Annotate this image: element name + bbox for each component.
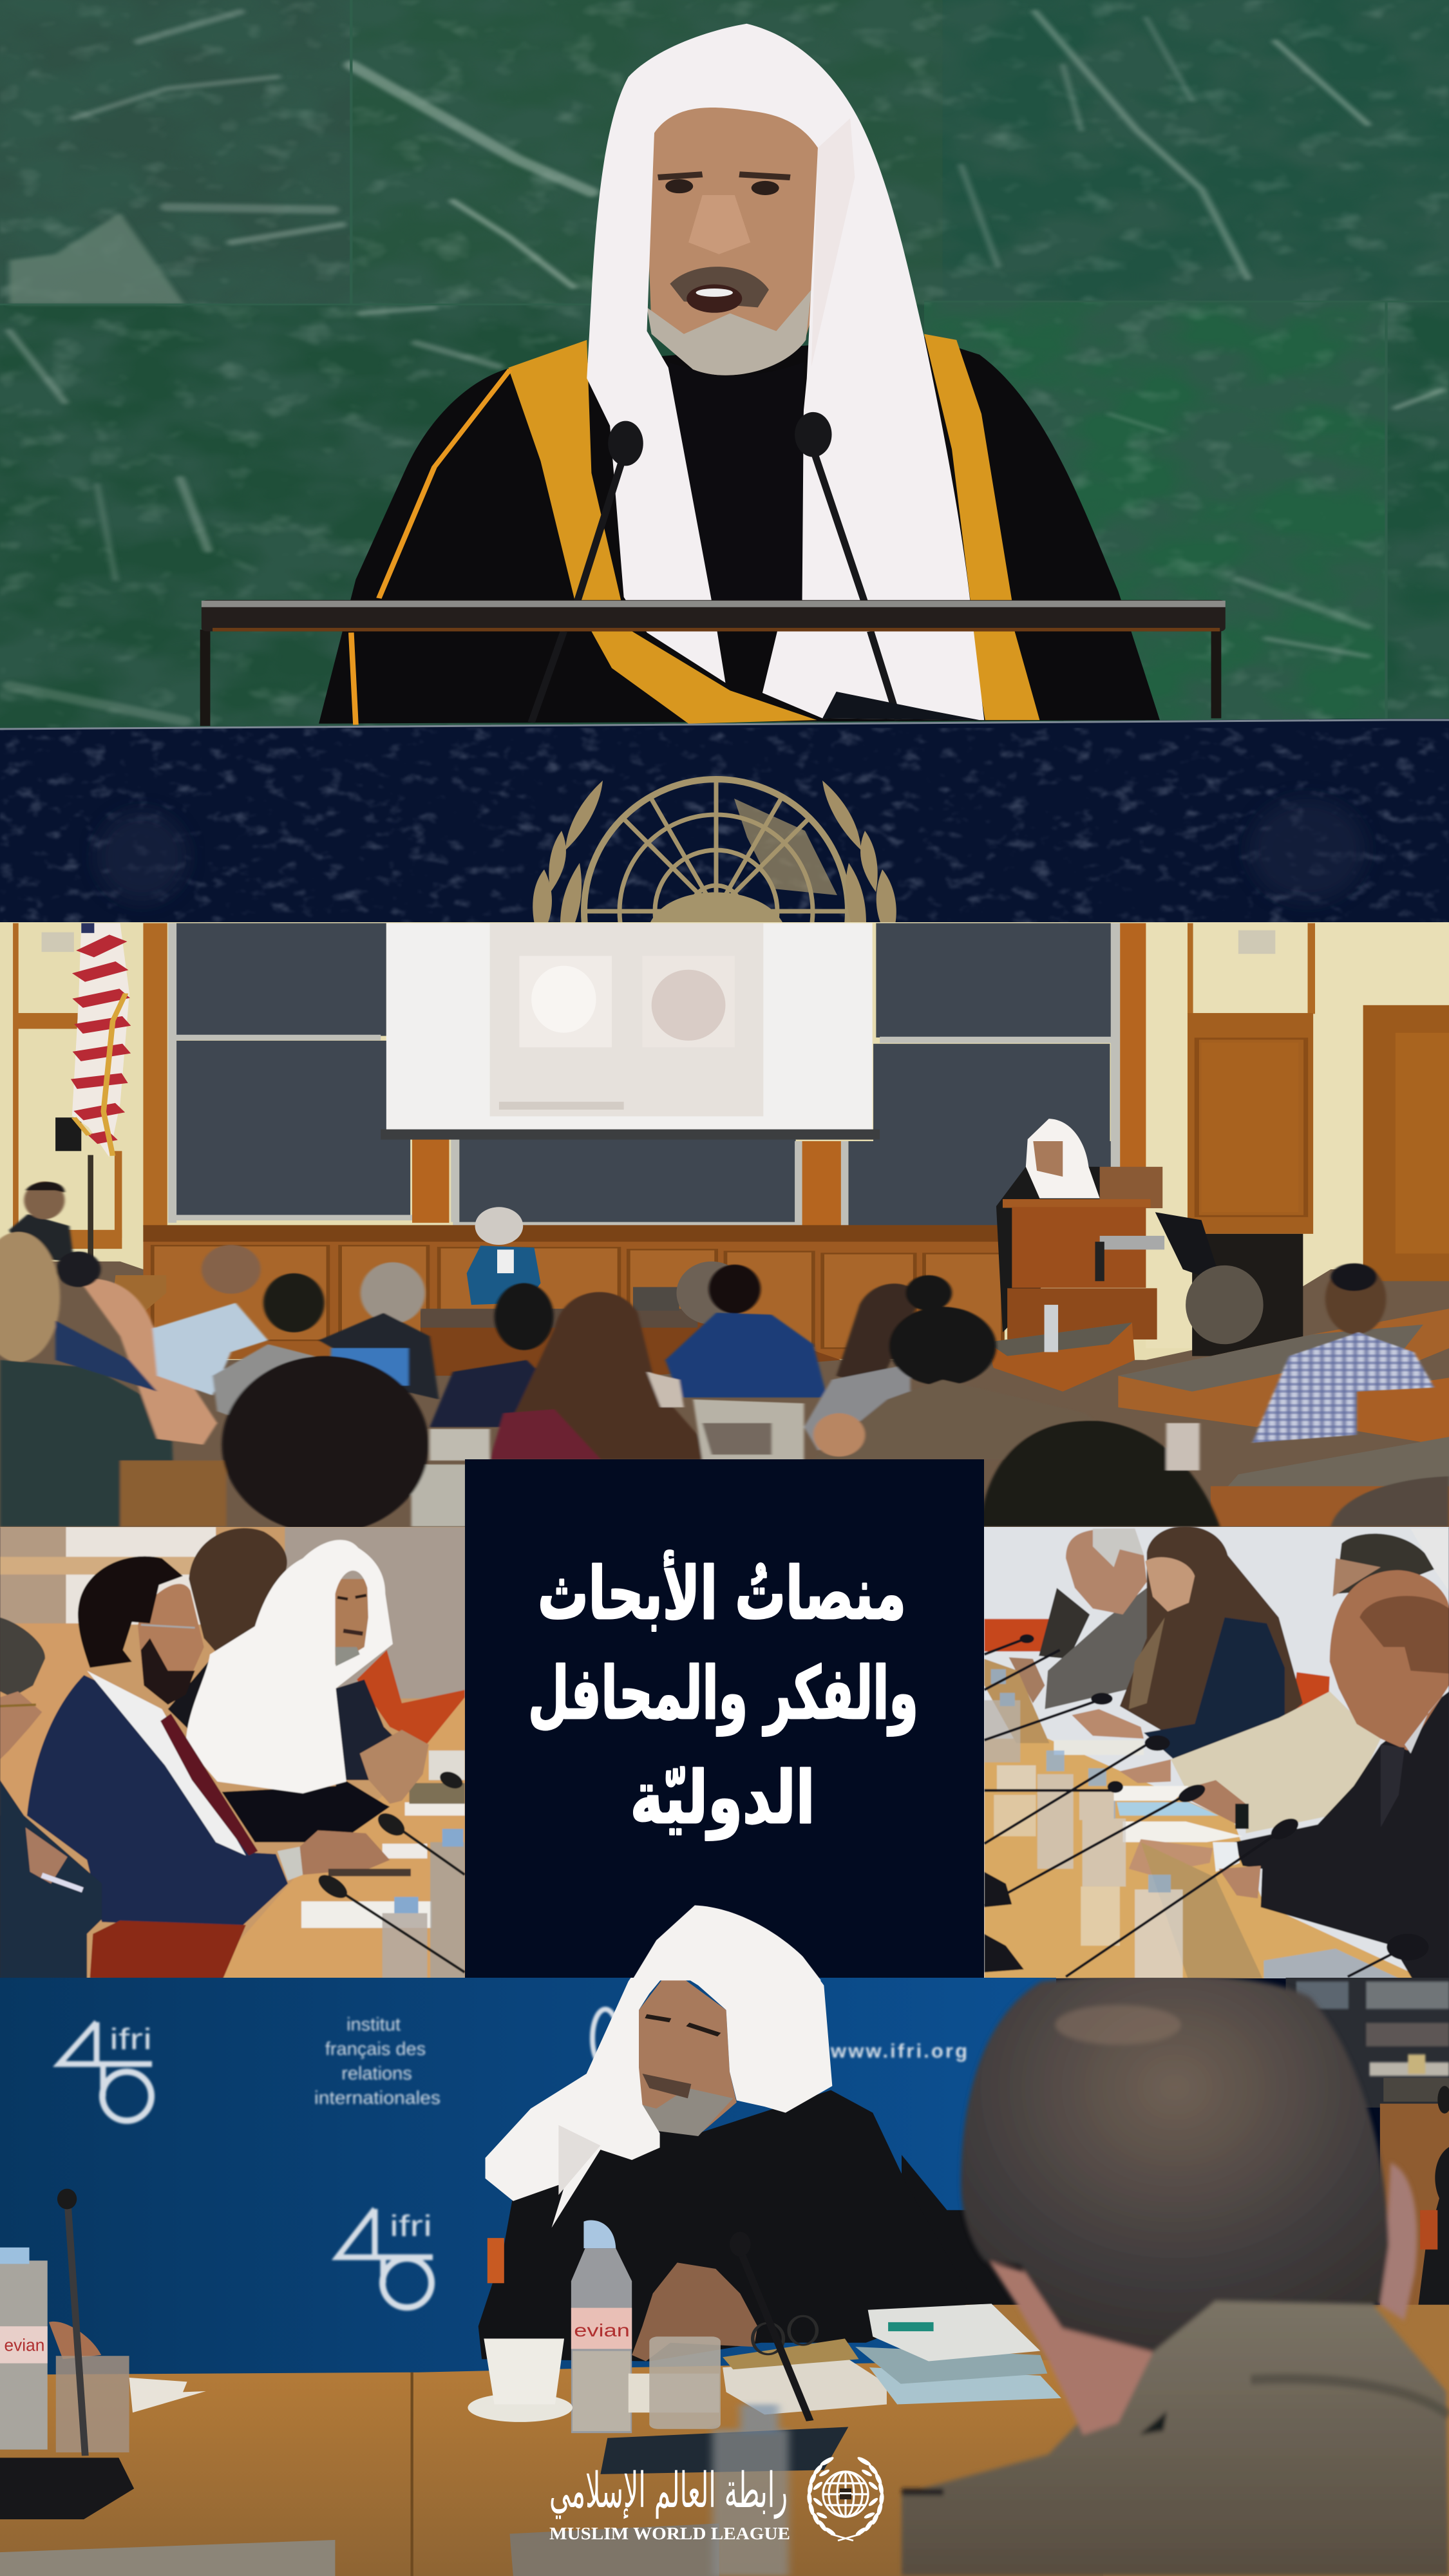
- white papers and glass: [629, 2374, 719, 2412]
- black robe: [319, 337, 1160, 724]
- left wall paneling: [13, 923, 167, 1249]
- white head covering: [486, 1906, 832, 2228]
- left place setting: [0, 2189, 206, 2519]
- navy podium front: [0, 719, 1449, 927]
- IFRI backdrop text: [59, 2009, 967, 2307]
- tan laptop: [1141, 1842, 1264, 1981]
- orange chairs: [357, 1650, 465, 1745]
- water bottle: [571, 2221, 632, 2433]
- laurels: [533, 781, 896, 924]
- logo wordmark: رابطة العالم الإسلامي: [549, 2463, 788, 2519]
- table: [204, 1698, 465, 1981]
- microphone: [740, 2250, 810, 2421]
- jacket: [902, 2301, 1449, 2576]
- head hair: [961, 1974, 1388, 2352]
- institute name: relations: [341, 2063, 412, 2084]
- speaker head covering above the panel edge: [632, 1906, 821, 1980]
- ifri logo 1: ifri: [109, 2022, 152, 2056]
- curly haired person behind: [189, 1528, 287, 1659]
- walls: [0, 914, 1449, 1533]
- gold trim: [508, 334, 1039, 724]
- bottles: [430, 1842, 465, 1981]
- speaker figure: [202, 24, 1226, 726]
- blond student: [0, 1232, 60, 1362]
- coffee cup: [468, 2338, 573, 2422]
- desks in the foreground: [120, 1461, 227, 1526]
- podium rail: [205, 630, 1216, 726]
- title text: منصاتُ الأبحاث: [538, 1550, 906, 1636]
- projection screen: [386, 923, 873, 1133]
- photo: university lecture hall: [0, 914, 1449, 1533]
- head and face: [639, 1969, 737, 2136]
- book shelves and background behind the right head: [902, 1978, 1449, 2576]
- wood pillars: [412, 923, 1146, 1236]
- collar shadow: [667, 362, 804, 601]
- microphones: [531, 455, 898, 723]
- institute name: internationales: [314, 2088, 440, 2108]
- white robe man: [222, 1689, 390, 1842]
- papers: [1114, 1786, 1189, 1801]
- bald man in dark suit: [1234, 1691, 1449, 1981]
- back man dark hair: [1336, 1533, 1436, 1594]
- dark haired: [263, 1273, 325, 1332]
- stack of books: [855, 2304, 1061, 2404]
- photo: left side meeting delegates: [0, 1520, 468, 1981]
- man blue shirt: [709, 1265, 761, 1314]
- logo emblem globe and laurel: [807, 2456, 884, 2541]
- left man: [0, 1618, 45, 1698]
- beige jacket: [1171, 1691, 1381, 1833]
- left place setting: evian: [5, 2335, 44, 2354]
- bottles: [984, 1669, 1183, 1981]
- green marble wall: [0, 0, 1449, 733]
- water bottle: evian: [574, 2321, 630, 2341]
- grey haired: [361, 1262, 425, 1323]
- standing person left rear: [9, 1214, 74, 1262]
- bald man: [202, 1245, 261, 1294]
- photo: right side meeting delegates: [979, 1520, 1449, 1984]
- right wall cabinet and door: [1188, 923, 1449, 1356]
- logo: Muslim World League: [549, 2456, 884, 2543]
- table: [984, 1739, 1417, 1981]
- blue IFRI backdrop: [0, 1978, 1056, 2390]
- wall: [0, 1520, 468, 1981]
- microphones: [984, 1638, 1419, 1976]
- audience: [0, 1181, 1449, 1533]
- institute name: [314, 2014, 440, 2108]
- navy suit man: [27, 1675, 288, 1928]
- neck and ears: [989, 2261, 1216, 2435]
- woman with long hair: [1120, 1526, 1303, 1736]
- long hair woman: [490, 1292, 707, 1459]
- laptop: [984, 1659, 1049, 1743]
- orange chairs: [984, 1619, 1056, 1651]
- right tables: [1118, 1309, 1449, 1427]
- blurred front bottle: [712, 2404, 789, 2576]
- title text: والفكر والمحافل: [528, 1652, 918, 1736]
- man brown jacket: [889, 1307, 996, 1386]
- logo wordmark: [549, 2463, 790, 2543]
- dark hair: [495, 1283, 554, 1350]
- center tables: [421, 1311, 841, 1376]
- seated woman: [467, 1207, 540, 1305]
- foreground blurred man: [902, 1974, 1449, 2576]
- wood wainscot: [143, 1225, 1003, 1359]
- laptop corner bottom: [0, 2540, 335, 2576]
- microphones: [342, 1830, 465, 1973]
- title text: [528, 1550, 918, 1841]
- US flag: [72, 923, 129, 1262]
- foreground center head: [222, 1356, 429, 1533]
- website address: www.ifri.org: [830, 2040, 967, 2062]
- white head covering: [587, 24, 984, 720]
- hands: [632, 2262, 757, 2362]
- left side table: [111, 1275, 166, 1325]
- UN emblem: [533, 779, 896, 1043]
- lower room floor and desks base: [0, 1262, 1449, 1533]
- man plaid shirt: [1325, 1264, 1386, 1334]
- chalkboards: [172, 923, 1111, 1229]
- face: [647, 100, 822, 375]
- ifri logo 1: [59, 2022, 152, 2121]
- white wall: [979, 1520, 1449, 1984]
- collar shadow: [1139, 2411, 1167, 2435]
- institute name: institut: [346, 2014, 401, 2035]
- ifri logo 2: [337, 2209, 433, 2307]
- panel: title block: [465, 1459, 984, 1978]
- red chair: [90, 1920, 246, 1981]
- institute name: français des: [325, 2039, 426, 2060]
- black robe: [478, 2090, 974, 2362]
- woman right brown hair: [837, 1283, 920, 1388]
- title text: الدوليّة: [630, 1756, 815, 1841]
- logo wordmark: MUSLIM WORLD LEAGUE: [549, 2524, 790, 2543]
- glasses: [753, 2316, 817, 2354]
- lectern and distant speaker: [987, 1119, 1264, 1392]
- ifri logo 2: ifri: [390, 2209, 432, 2242]
- photo: IFRI round table: [0, 1906, 1449, 2576]
- photo: speaker at the United Nations podium: [0, 0, 1449, 1043]
- old man: [1039, 1588, 1090, 1659]
- table: [0, 2359, 1103, 2576]
